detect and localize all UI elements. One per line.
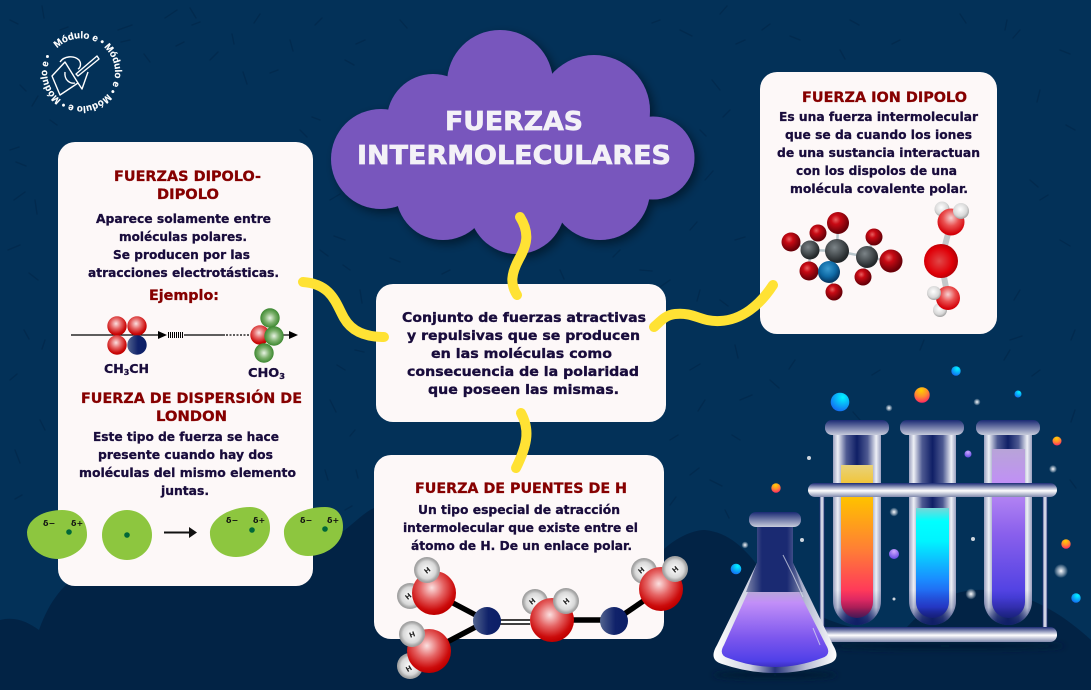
heading: London: FUERZA DE DISPERSIÓN DE: [81, 389, 302, 407]
tube 3: [976, 420, 1040, 625]
title: [357, 107, 671, 171]
diagram: molecule chain: [71, 308, 298, 381]
text: definition: Conjunto de fuerzas atractivas: [402, 310, 646, 326]
blob 2: [102, 510, 152, 560]
heading: London: [81, 389, 302, 425]
text: Es una fuerza intermolecular: [779, 109, 979, 124]
blob 3: δ+: [253, 516, 265, 525]
H labels: H: [637, 566, 647, 576]
text: Un tipo especial de atracción: [418, 502, 620, 517]
blob 4: δ+: [327, 516, 339, 525]
blob 4: [284, 507, 343, 556]
hydrogen atoms (front): [399, 556, 688, 647]
blob 1: [27, 510, 87, 559]
flask liquid: [722, 592, 828, 667]
flask shadow: [713, 671, 837, 679]
panel: definition: [376, 284, 666, 422]
icon: notebook and pencil: [52, 56, 99, 95]
cloud shape: [331, 30, 694, 254]
text: dipolo body: Aparece solamente entre: [96, 211, 271, 226]
label: CH3CH: CH: [129, 361, 149, 376]
blob 1: δ+: [71, 519, 83, 528]
text: dipolo body: moléculas polares.: [119, 229, 247, 244]
floating particles: [731, 366, 1081, 603]
blob 3: δ−: [226, 516, 238, 525]
heading: FUERZA ION DIPOLO: [802, 90, 967, 106]
flask highlights: [783, 555, 820, 645]
molecule: ball and stick: [782, 212, 902, 300]
heading: dipolo: DIPOLO: [157, 187, 219, 203]
tube 1: [825, 420, 889, 625]
H labels: H: [408, 630, 417, 640]
text: que se da cuando los iones: [785, 127, 972, 142]
H labels: H: [404, 592, 414, 602]
text: molécula covalente polar.: [790, 181, 968, 196]
text: London body: Este tipo de fuerza se hace: [93, 429, 279, 444]
panel: ion dipolo: [760, 72, 997, 334]
blob 4: δ−: [300, 516, 312, 525]
H labels: H: [528, 597, 538, 607]
panel: dipolo-dipolo and London: [27, 142, 343, 586]
H labels: H: [671, 565, 681, 575]
flask interior: [746, 526, 803, 592]
connector: right: [654, 285, 773, 327]
H labels: H: [404, 664, 414, 674]
text: dipolo body: [88, 211, 279, 280]
text: London body: moléculas del mismo elemento: [79, 465, 296, 480]
title: FUERZAS: [445, 107, 583, 137]
rack posts: [820, 495, 1047, 630]
text: [403, 502, 638, 553]
molecule: water chain: [924, 202, 969, 317]
heading: FUERZA DE PUENTES DE H: [415, 481, 627, 497]
connector: left: [303, 282, 384, 337]
text: London body: juntas.: [160, 483, 209, 498]
text: átomo de H. De un enlace polar.: [411, 538, 632, 553]
diagram: London dispersion: [27, 507, 343, 560]
text: dipolo body: atracciones electrotásticas.: [88, 265, 279, 280]
label: CHO3: CHO: [248, 365, 278, 380]
text: con los dispolos de una: [796, 163, 957, 178]
heading: ejemplo: Ejemplo:: [149, 288, 219, 304]
connector: bottom: [516, 413, 526, 468]
connector: top: [512, 217, 526, 295]
text: definition: consecuencia de la polaridad: [407, 364, 639, 380]
H labels: [404, 565, 681, 674]
arrow: [164, 527, 197, 538]
text: intermolecular que existe entre el: [403, 520, 638, 535]
title cloud: [331, 30, 694, 254]
logo badge: [40, 31, 122, 114]
title: INTERMOLECULARES: [357, 141, 671, 171]
H labels: H: [562, 597, 572, 607]
blob 1: δ−: [43, 519, 55, 528]
label: CH3CH: CH: [104, 361, 124, 376]
text: [777, 109, 980, 196]
text: definition: en las moléculas como: [431, 346, 612, 362]
diagram: hydrogen bond molecule: [397, 556, 688, 679]
blob 3: [210, 507, 270, 557]
text: definition: [402, 310, 646, 398]
logo ring text: Módulo e • Módulo e • Módulo e • Módulo e •: [40, 31, 122, 114]
flask glass: [713, 524, 837, 673]
flask cap: [749, 512, 801, 527]
molecule: CH3CH: [107, 316, 147, 355]
heading: London: LONDON: [156, 409, 227, 425]
rack bottom bar: [815, 627, 1057, 642]
label: CH3CH: 3: [124, 368, 129, 377]
rack shadow: [825, 642, 1065, 650]
connector lines: [303, 217, 773, 468]
label: CHO3: 3: [279, 372, 285, 381]
molecule: CHO3: [250, 308, 284, 363]
text: London body: presente cuando hay dos: [98, 447, 273, 462]
text: London body: [79, 429, 296, 498]
flask: [713, 512, 837, 673]
heading: dipolo: [114, 169, 261, 203]
H labels: H: [423, 566, 433, 576]
panel: puentes de H: [374, 455, 688, 679]
text: de una sustancia interactuan: [777, 145, 980, 160]
dark hills: [0, 508, 1091, 690]
heading: dipolo: FUERZAS DIPOLO-: [114, 169, 261, 185]
text: definition: y repulsivas que se producen: [407, 328, 640, 344]
text: dipolo body: Se producen por las: [113, 247, 250, 262]
tube 2: [900, 420, 964, 625]
oxygen atoms: [407, 567, 683, 673]
rack top bar: [808, 483, 1057, 497]
illustration: test tubes and flask: [713, 366, 1081, 679]
text: definition: que poseen las mismas.: [428, 382, 619, 398]
hydrogen atoms (rear): [397, 558, 657, 679]
nitrogen atoms: [473, 607, 628, 635]
